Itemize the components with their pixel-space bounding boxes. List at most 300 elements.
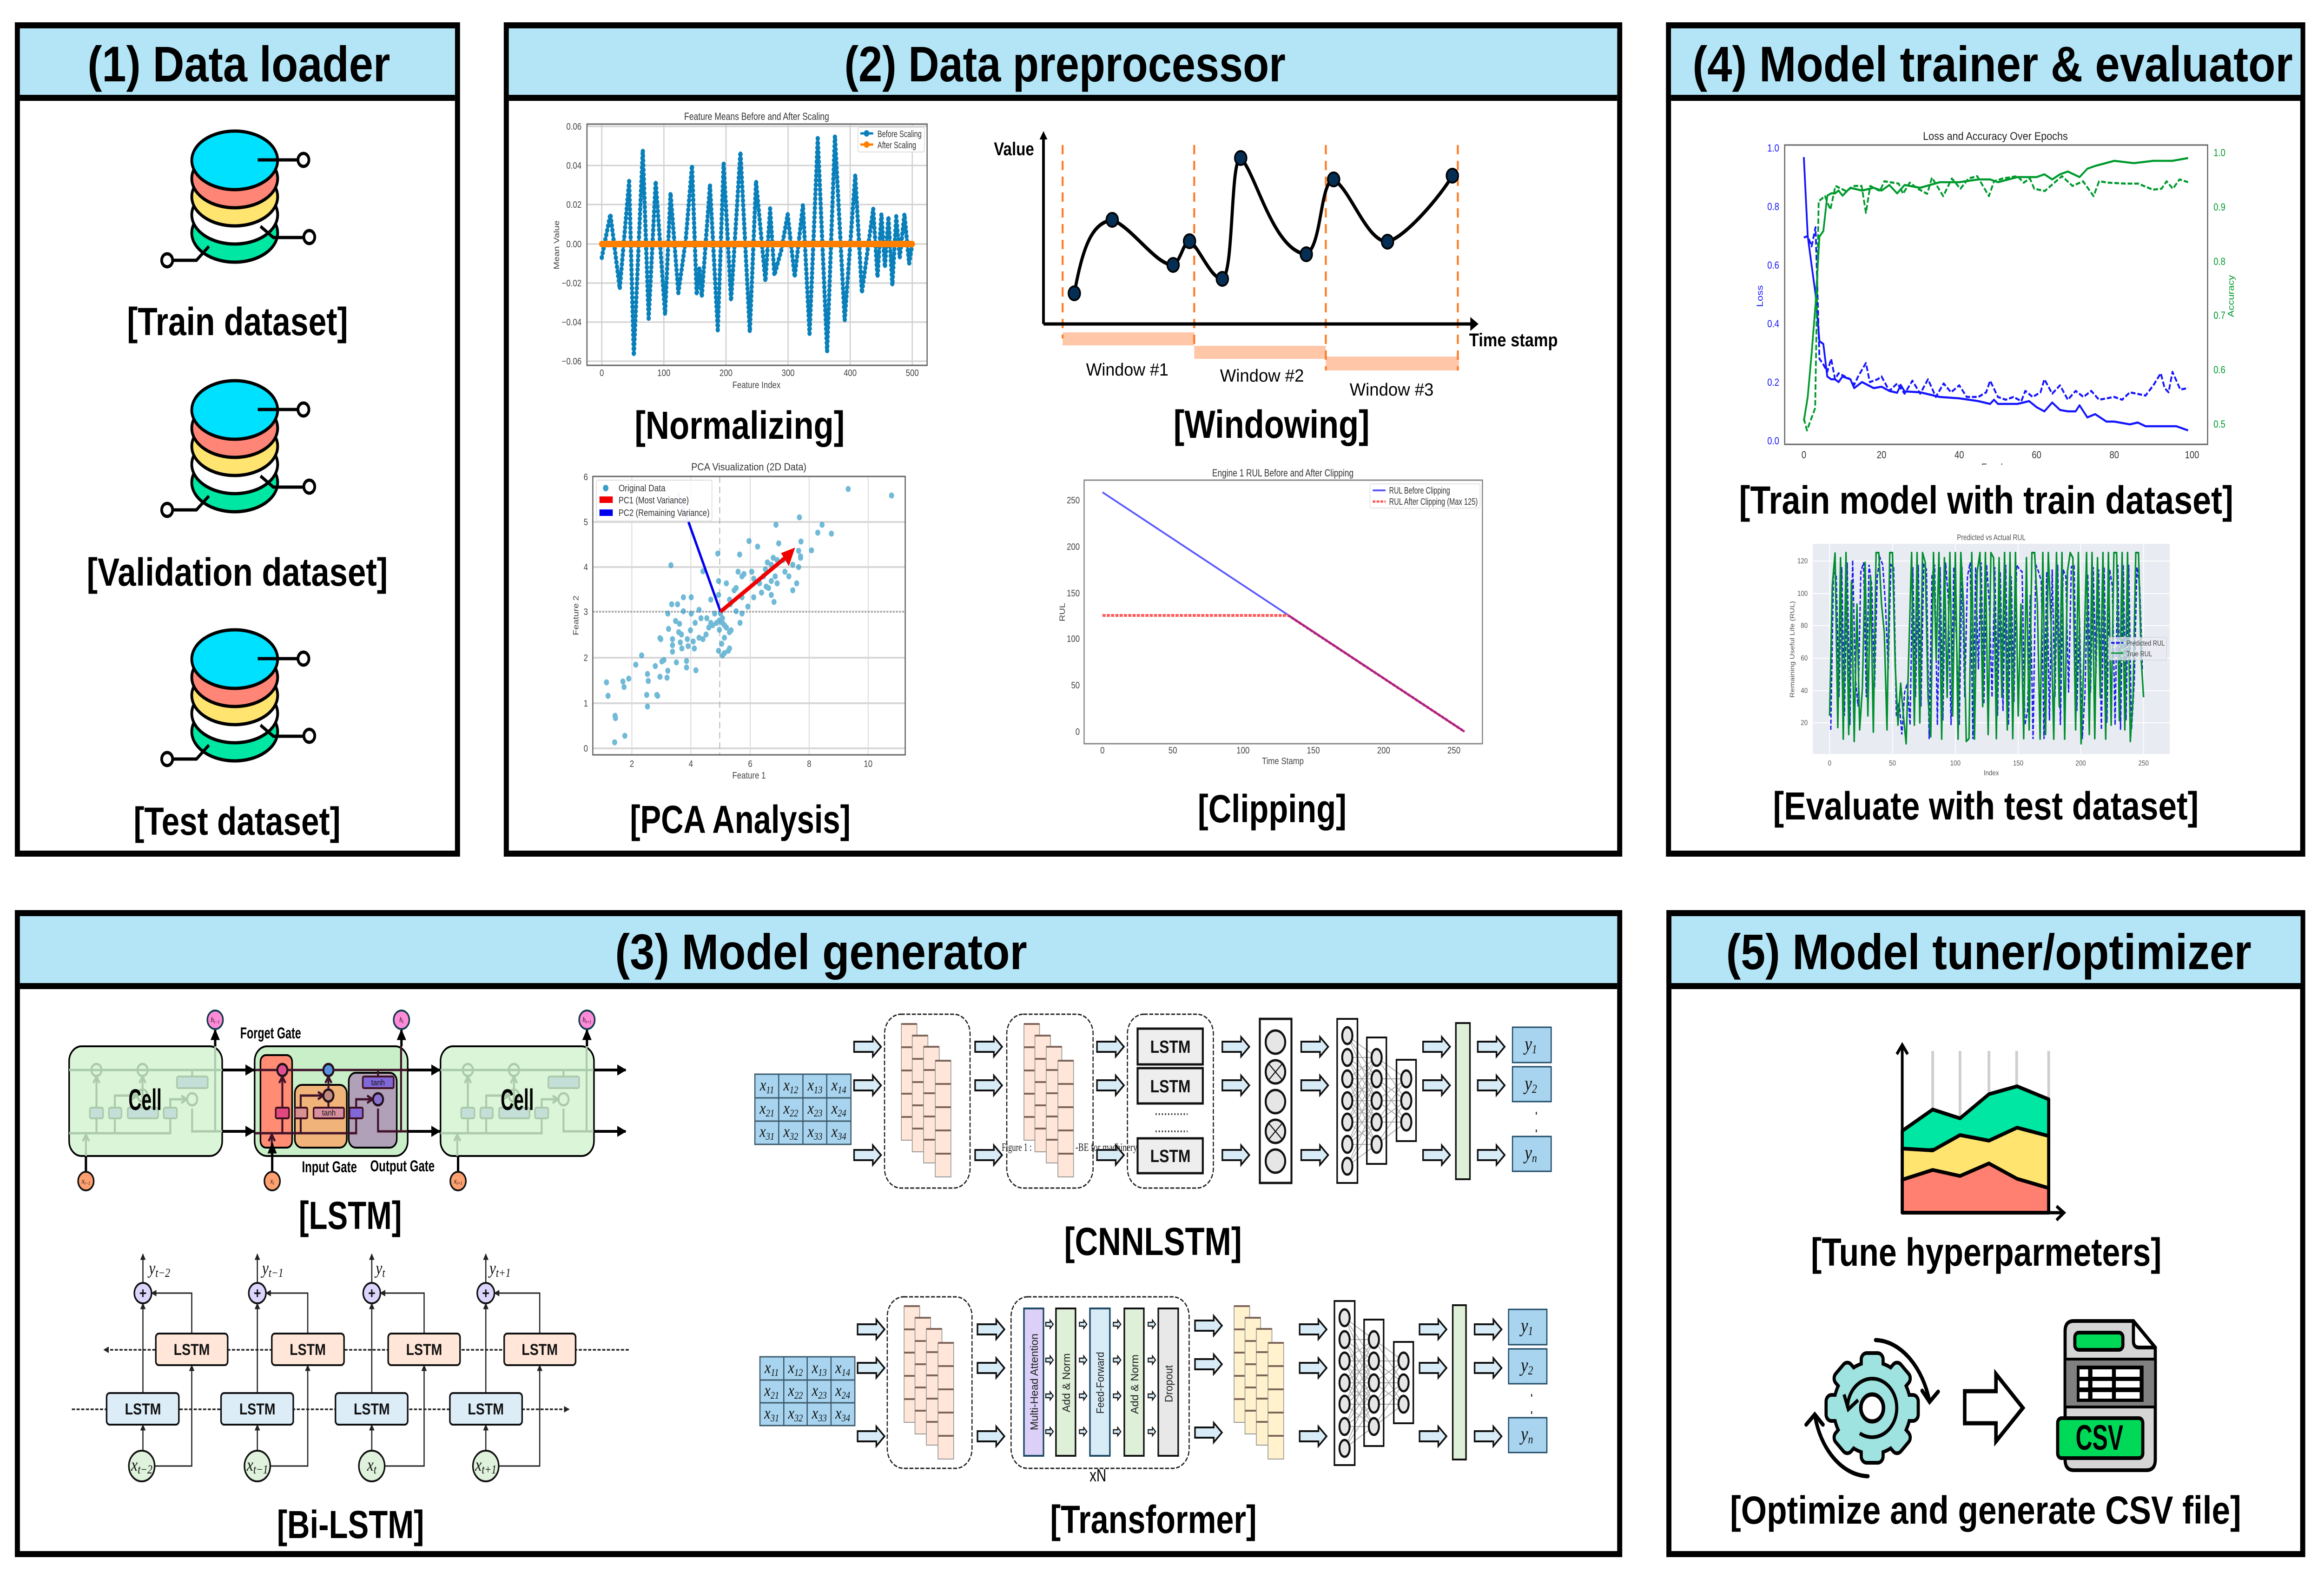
legend: PCA: Original Data: [619, 483, 666, 493]
panel: model tuner: [1669, 913, 2303, 1554]
chart: loss and accuracy: 40: [1954, 450, 1964, 461]
input matrix: 34: [841, 1413, 850, 1424]
chart: predicted vs actual RUL: 120: [1797, 557, 1808, 565]
diagram: Bi-LSTM: LSTM: [239, 1400, 276, 1418]
chart: predicted vs actual RUL: Remaining Useful Life (RUL): [1789, 601, 1796, 698]
input matrix: 14: [842, 1367, 850, 1378]
input matrix: x: [812, 1381, 818, 1400]
encoder bars: [1024, 1308, 1178, 1456]
legend: normalizing: [858, 127, 924, 152]
diagram: LSTM chain: t−1: [214, 1019, 219, 1024]
input matrix: 23: [814, 1108, 822, 1119]
label: evaluate: [Evaluate with test dataset]: [1773, 785, 2199, 828]
backward LSTM boxes: [156, 1334, 575, 1365]
convolution stacks: [901, 1024, 1074, 1177]
dashed modules: [885, 1014, 1213, 1188]
diagram: Bi-LSTM: t: [374, 1463, 377, 1476]
chart: loss and accuracy: 0.2: [1767, 377, 1779, 388]
chart: clipping: 100: [1236, 745, 1249, 755]
heading: model tuner: (5) Model tuner/optimizer: [1726, 925, 2251, 980]
chart: normalizing line chart: 200: [720, 368, 733, 378]
chart: windowing diagram: [994, 131, 1558, 400]
chart: predicted vs actual RUL: Index: [1984, 769, 1999, 777]
LSTM cell 3: [441, 1046, 594, 1156]
chart: clipping: Time Stamp: [1262, 756, 1304, 766]
input matrix: [755, 1074, 851, 1144]
chart: predicted vs actual RUL: 20: [1801, 719, 1808, 727]
dropout column: [1260, 1019, 1292, 1183]
chart: normalizing line chart: 500: [906, 368, 919, 378]
chart: loss and accuracy: Accuracy: [2226, 275, 2236, 317]
input matrix: 13: [818, 1367, 827, 1378]
diagram: LSTM chain: Output Gate: [370, 1157, 435, 1175]
panel: data loader: [17, 25, 457, 853]
output boxes: 1: [1532, 1043, 1537, 1056]
legend: PCA: [596, 480, 712, 521]
diagram: LSTM chain: x: [454, 1177, 456, 1185]
legend: RUL: [2108, 637, 2166, 660]
label: train dataset: [Train dataset]: [127, 300, 348, 343]
chart: PCA scatter: 2: [584, 653, 588, 663]
diagram: Bi-LSTM: LSTM: [174, 1341, 210, 1359]
label: normalizing: [Normalizing]: [634, 404, 845, 447]
diagram: LSTM chain: Forget Gate: [240, 1024, 301, 1042]
input matrix: x: [812, 1404, 818, 1423]
diagram: LSTM chain: h: [399, 1016, 403, 1024]
chart: predicted vs actual RUL: 60: [1801, 654, 1808, 662]
diagram: LSTM chain: h: [211, 1016, 214, 1024]
dashed modules: [887, 1297, 1189, 1468]
LSTM layers: [1137, 1029, 1203, 1173]
input matrix: x: [765, 1359, 771, 1377]
forward LSTM boxes: [106, 1393, 522, 1425]
diagram: Bi-LSTM: y: [489, 1258, 496, 1278]
chart: PCA scatter: 5: [584, 517, 588, 527]
input matrix: 21: [771, 1390, 779, 1401]
legend: PCA: PC1 (Most Variance): [619, 495, 689, 505]
encoder bar labels: Feed-Forward: [1095, 1352, 1107, 1414]
input matrix: x: [783, 1076, 790, 1095]
LSTM cell 2 with gates: tanh: [371, 1078, 385, 1087]
label: LSTM: [LSTM]: [299, 1194, 402, 1237]
input matrix: x: [835, 1359, 842, 1377]
chart: normalizing line chart: Mean Value: [552, 220, 561, 270]
heading: model generator: (3) Model generator: [615, 925, 1027, 980]
chart: PCA scatter: 2: [630, 759, 634, 769]
chart: loss and accuracy: Loss and Accuracy Over Epochs: [1923, 130, 2068, 142]
legend: RUL: Predicted RUL: [2126, 640, 2165, 647]
input matrix: x: [832, 1076, 838, 1095]
chart: predicted vs actual RUL: 100: [1950, 760, 1961, 767]
LSTM cell 1: Cell: [128, 1083, 162, 1116]
input matrix: 12: [794, 1367, 803, 1378]
chart: loss and accuracy: 60: [2032, 450, 2041, 461]
label: train model: [Train model with train dataset]: [1739, 479, 2233, 522]
input matrix: 33: [818, 1413, 827, 1424]
input matrix: 11: [771, 1367, 779, 1378]
chart: windowing diagram: Time stamp: [1469, 330, 1558, 350]
chart: loss and accuracy: 0.8: [2213, 257, 2225, 267]
diagram: Bi-LSTM: LSTM: [125, 1400, 161, 1418]
chart: loss and accuracy: 100: [2185, 450, 2199, 461]
icon: CSV file: CSV: [2076, 1418, 2123, 1457]
input matrix: x: [783, 1123, 790, 1141]
diagram: LSTM chain: t: [403, 1019, 404, 1024]
label: tune hyperparameters: [Tune hyperparmeters]: [1811, 1231, 2161, 1274]
input matrix: x: [788, 1359, 794, 1377]
dense network: [1334, 1301, 1413, 1465]
legend: normalizing: Before Scaling: [878, 129, 922, 139]
chart: normalizing line chart: −0.02: [562, 278, 581, 288]
chart: normalizing line chart: 400: [844, 368, 857, 378]
LSTM cell 2 with gates: [255, 1046, 408, 1156]
chart: predicted vs actual RUL: Predicted vs Actual RUL: [1957, 533, 2026, 542]
chart: clipping: 250: [1067, 495, 1080, 505]
diagram: Bi-LSTM: [72, 1254, 629, 1481]
convolution stack: [904, 1306, 954, 1459]
chart: loss and accuracy: 0: [1802, 450, 1806, 461]
header: model trainer: [1671, 28, 2301, 101]
legend: clipping: RUL Before Clipping: [1389, 485, 1450, 495]
panel: data preprocessor: [506, 25, 1620, 853]
stray caption text: Figure 1 :: [1002, 1141, 1032, 1153]
LSTM layers: LSTM: [1150, 1037, 1190, 1057]
chart: PCA scatter: 0: [584, 743, 588, 753]
output boxes: y: [1521, 1423, 1528, 1445]
input matrix: 22: [794, 1390, 803, 1401]
chart: predicted vs actual RUL: 40: [1801, 687, 1808, 695]
input matrix: 24: [838, 1108, 846, 1119]
chart: predicted vs actual RUL: 0: [1828, 760, 1831, 767]
diagram: Bi-LSTM: t−1: [269, 1267, 284, 1280]
diagram: Bi-LSTM: x: [367, 1455, 374, 1475]
outputs: [207, 1011, 595, 1029]
input matrix: x: [759, 1099, 766, 1118]
chart: normalizing line chart: 0.02: [566, 199, 581, 210]
chart: clipping: 200: [1067, 542, 1080, 552]
input matrix: x: [808, 1123, 814, 1141]
diagram: Bi-LSTM: LSTM: [468, 1400, 504, 1418]
chart: PCA scatter: 10: [864, 759, 872, 769]
legend: normalizing: After Scaling: [878, 140, 916, 150]
chart: clipping: [1058, 468, 1482, 766]
chart: clipping: 50: [1071, 680, 1080, 690]
chart: loss and accuracy: 0.4: [1767, 319, 1779, 330]
input matrix: 11: [766, 1085, 774, 1096]
input matrix: x: [788, 1381, 794, 1400]
chart: normalizing line chart: 0: [600, 368, 604, 378]
input matrix: x: [783, 1099, 790, 1118]
output boxes: 2: [1528, 1364, 1533, 1377]
output boxes: 2: [1532, 1083, 1537, 1096]
input matrix: x: [812, 1359, 818, 1377]
diagram: Bi-LSTM: t: [382, 1267, 386, 1280]
input matrix: 23: [818, 1390, 827, 1401]
LSTM layers: LSTM: [1150, 1077, 1190, 1096]
chart: clipping: 150: [1307, 745, 1320, 755]
diagram: Bi-LSTM: x: [475, 1455, 482, 1475]
chart: normalizing line chart: [552, 112, 927, 390]
diagram: LSTM chain: h: [582, 1016, 586, 1024]
input matrix: 24: [842, 1390, 850, 1401]
chart: loss and accuracy: 0.5: [2213, 419, 2225, 430]
chart: predicted vs actual RUL: 200: [2075, 760, 2086, 767]
diagram: Bi-LSTM: +: [482, 1285, 489, 1302]
legend: PCA: PC2 (Remaining Variance): [619, 508, 710, 518]
icon: gear: [1806, 1340, 1938, 1476]
chart: stacked area: [1897, 1045, 2064, 1220]
chart: PCA scatter: 1: [584, 698, 588, 708]
output boxes: y: [1525, 1033, 1532, 1055]
encoder bar labels: Add & Norm: [1129, 1354, 1141, 1414]
header: data loader: [20, 28, 455, 101]
output boxes: n: [1532, 1152, 1537, 1165]
chart: predicted vs actual RUL: 250: [2139, 760, 2149, 767]
output boxes: y: [1521, 1354, 1528, 1376]
flow arrows: [858, 1316, 1502, 1446]
chart: clipping: RUL: [1058, 603, 1067, 621]
diagram: Bi-LSTM: x: [247, 1455, 253, 1475]
input matrix: x: [835, 1381, 842, 1400]
chart: normalizing line chart: −0.06: [562, 356, 581, 366]
chart: predicted vs actual RUL: 150: [2013, 760, 2023, 767]
input matrix: x: [788, 1404, 794, 1423]
chart: loss and accuracy: Loss: [1756, 285, 1765, 307]
label: clipping: [Clipping]: [1198, 787, 1347, 831]
panel: model trainer and evaluator: [1669, 25, 2303, 853]
output boxes: n: [1528, 1433, 1533, 1446]
chart: predicted vs actual RUL: [1789, 533, 2170, 777]
chart: predicted vs actual RUL: 100: [1797, 590, 1808, 598]
chart: loss and accuracy: 1.0: [2213, 148, 2225, 159]
small arrows between bars: [1046, 1320, 1155, 1436]
header: data preprocessor: [509, 28, 1617, 101]
chart: clipping: 150: [1067, 588, 1080, 598]
header: model generator: [20, 916, 1617, 989]
chart: normalizing line chart: 300: [781, 368, 795, 378]
input matrix: 14: [838, 1085, 846, 1096]
PC2 arrow: [678, 493, 720, 612]
diagram: LSTM chain: t+1: [586, 1019, 591, 1024]
chart: clipping: 0: [1076, 727, 1080, 737]
heading: data preprocessor: (2) Data preprocessor: [845, 37, 1286, 92]
diagram: LSTM chain: x: [82, 1177, 85, 1185]
chart: loss and accuracy: 80: [2110, 450, 2119, 461]
output boxes: [1509, 1309, 1547, 1453]
diagram: Transformer: xN: [1089, 1466, 1106, 1486]
icon: CSV file: [2058, 1321, 2155, 1470]
input matrix: 21: [766, 1108, 774, 1119]
chart: loss and accuracy: 0.0: [1767, 436, 1779, 447]
diagram: LSTM chain: t−1: [85, 1181, 90, 1186]
chart: PCA scatter: [571, 462, 905, 780]
chart: PCA scatter: PCA Visualization (2D Data): [691, 462, 806, 473]
diagram: CNN-LSTM: [755, 1014, 1551, 1188]
chart: loss and accuracy: 1.0: [1767, 143, 1779, 154]
icon: validation database: [162, 381, 315, 516]
legend: clipping: [1370, 484, 1480, 508]
input matrix: x: [832, 1099, 838, 1118]
diagram: Bi-LSTM: +: [139, 1285, 146, 1302]
diagram: Bi-LSTM: t−2: [155, 1267, 170, 1280]
diagram: Bi-LSTM: +: [368, 1285, 376, 1302]
chart: clipping: Engine 1 RUL Before and After Clipping: [1212, 468, 1353, 479]
chart: loss and accuracy: 0.6: [2213, 365, 2225, 376]
input matrix: x: [808, 1099, 814, 1118]
chart: normalizing line chart: Feature Index: [733, 380, 781, 390]
input matrix: 32: [794, 1413, 803, 1424]
chart: loss and accuracy: 0.7: [2213, 310, 2225, 321]
diagram: Bi-LSTM: y: [149, 1258, 155, 1278]
encoder bar labels: Add & Norm: [1061, 1353, 1073, 1413]
panel: model generator: [17, 913, 1620, 1554]
encoder bar labels: [1029, 1334, 1175, 1430]
chart: PCA scatter: 4: [689, 759, 693, 769]
chart: clipping: 200: [1377, 745, 1390, 755]
chart: clipping: 250: [1447, 745, 1460, 755]
diagram: LSTM chain: x: [270, 1177, 273, 1185]
yellow feature stack: [1234, 1306, 1284, 1459]
diagram: Bi-LSTM: +: [254, 1285, 261, 1302]
input matrix: 12: [790, 1085, 798, 1096]
input matrix: 22: [790, 1108, 798, 1119]
flow arrows: [854, 1037, 1505, 1165]
input matrix: 34: [837, 1131, 846, 1142]
label: Bi-LSTM: [Bi-LSTM]: [277, 1503, 424, 1546]
diagram: Bi-LSTM: t−2: [138, 1463, 152, 1476]
window bars: [1063, 332, 1459, 370]
label: test dataset: [Test dataset]: [133, 800, 341, 843]
input matrix: x: [760, 1076, 766, 1095]
inputs: [78, 1172, 466, 1190]
output boxes: y: [1525, 1073, 1532, 1095]
input matrix: x: [808, 1076, 814, 1095]
LSTM cell 3: Cell: [501, 1083, 534, 1116]
chart: clipping: 0: [1100, 745, 1105, 755]
header: model tuner: [1671, 916, 2301, 989]
diagram: LSTM chain: t+1: [456, 1181, 462, 1186]
encoder bar labels: Dropout: [1163, 1365, 1175, 1402]
label: optimize and generate: [Optimize and generate CSV file]: [1730, 1489, 2241, 1532]
input nodes: [129, 1451, 499, 1481]
chart: loss and accuracy: 0.8: [1767, 202, 1779, 212]
chart: clipping: 100: [1067, 634, 1080, 644]
chart: PCA scatter: 6: [584, 472, 588, 482]
chart: loss and accuracy: 0.6: [1767, 260, 1779, 271]
stray caption text: [1002, 1141, 1137, 1153]
chart: PCA scatter: Feature 1: [733, 770, 766, 780]
input matrix: 32: [789, 1131, 798, 1142]
input matrix: x: [764, 1404, 771, 1423]
chart: PCA scatter: 3: [584, 607, 588, 617]
chart: normalizing line chart: 0.00: [566, 239, 581, 249]
diagram: Transformer: [760, 1297, 1547, 1486]
heading: model trainer: (4) Model trainer & evaluator: [1692, 37, 2293, 92]
encoder bar labels: Multi-Head Attention: [1029, 1334, 1041, 1430]
output boxes: 1: [1528, 1325, 1533, 1338]
input matrix: x: [835, 1404, 842, 1423]
output boxes: [1512, 1027, 1551, 1171]
diagram: Bi-LSTM: LSTM: [290, 1341, 326, 1359]
icon: train database: [162, 131, 315, 267]
chart: PCA scatter: 6: [748, 759, 753, 769]
chart: normalizing line chart: −0.04: [562, 317, 581, 327]
chart: loss and accuracy: 20: [1877, 450, 1886, 461]
input matrix: x: [832, 1123, 838, 1141]
input matrix: x: [764, 1381, 771, 1400]
chart: normalizing line chart: 0.04: [566, 160, 581, 171]
chart: loss and accuracy: Epochs: [1981, 462, 2010, 473]
input matrix: [760, 1357, 855, 1426]
diagram: Bi-LSTM: y: [262, 1258, 269, 1278]
chart: windowing diagram: Window #2: [1220, 366, 1304, 386]
chart: normalizing line chart: 100: [657, 368, 670, 378]
diagram: LSTM chain: Input Gate: [302, 1158, 357, 1176]
diagram: Bi-LSTM: LSTM: [522, 1341, 558, 1359]
legend: RUL: True RUL: [2126, 650, 2152, 658]
chart: PCA scatter: 8: [807, 759, 812, 769]
chart: windowing diagram: Window #1: [1086, 360, 1169, 380]
diagram: Bi-LSTM: t+1: [482, 1463, 496, 1476]
output boxes: y: [1525, 1142, 1532, 1164]
chart: predicted vs actual RUL: 50: [1889, 760, 1896, 767]
dense network: [1337, 1019, 1416, 1183]
diagram: LSTM chain: t: [273, 1181, 274, 1186]
legend: clipping: RUL After Clipping (Max 125): [1389, 496, 1478, 507]
diagram: Bi-LSTM: x: [131, 1455, 138, 1475]
input matrix: 13: [814, 1085, 822, 1096]
chart: PCA scatter: Feature 2: [571, 595, 580, 635]
chart: loss and accuracy: [1756, 130, 2236, 474]
LSTM cell 2 with gates: tanh: [322, 1108, 336, 1117]
diagram: Bi-LSTM: t+1: [496, 1267, 511, 1280]
chart: normalizing line chart: 0.06: [566, 121, 581, 132]
diagram: Bi-LSTM: t−1: [253, 1463, 268, 1476]
diagram: Bi-LSTM: LSTM: [406, 1341, 442, 1359]
label: windowing: [Windowing]: [1174, 403, 1370, 446]
chart: normalizing line chart: Feature Means Before and After Scaling: [684, 112, 829, 122]
LSTM cell 1: [69, 1046, 222, 1156]
label: Transformer: [Transformer]: [1050, 1498, 1257, 1541]
output layer bar: [1453, 1305, 1466, 1460]
PC1 arrow: [720, 548, 795, 612]
chart: predicted vs actual RUL: 80: [1801, 622, 1808, 630]
diagram: Bi-LSTM: y: [376, 1258, 382, 1278]
diagram: LSTM chain: [69, 1011, 626, 1190]
label: validation dataset: [Validation dataset]: [87, 551, 388, 594]
LSTM layers: LSTM: [1150, 1146, 1190, 1166]
label: PCA analysis: [PCA Analysis]: [630, 798, 851, 841]
heading: data loader: (1) Data loader: [87, 37, 390, 92]
chart: PCA scatter: 4: [584, 562, 588, 572]
input matrix: 31: [770, 1413, 779, 1424]
arrow: gear to CSV: [1965, 1374, 2023, 1441]
input matrix: 31: [766, 1131, 774, 1142]
icon: test database: [162, 630, 315, 766]
chart: windowing diagram: Window #3: [1350, 380, 1433, 400]
chart: loss and accuracy: 0.9: [2213, 202, 2225, 213]
label: CNNLSTM: [CNNLSTM]: [1064, 1220, 1242, 1263]
chart: windowing diagram: Value: [994, 139, 1034, 159]
diagram: Bi-LSTM: LSTM: [354, 1400, 390, 1418]
input matrix: 33: [813, 1131, 822, 1142]
input matrix: x: [759, 1123, 766, 1141]
output layer bar: [1456, 1023, 1470, 1179]
plus nodes: [134, 1283, 495, 1303]
chart: clipping: 50: [1169, 745, 1177, 755]
stray caption text: -BE for machinery: [1076, 1141, 1137, 1153]
output boxes: y: [1521, 1315, 1528, 1337]
